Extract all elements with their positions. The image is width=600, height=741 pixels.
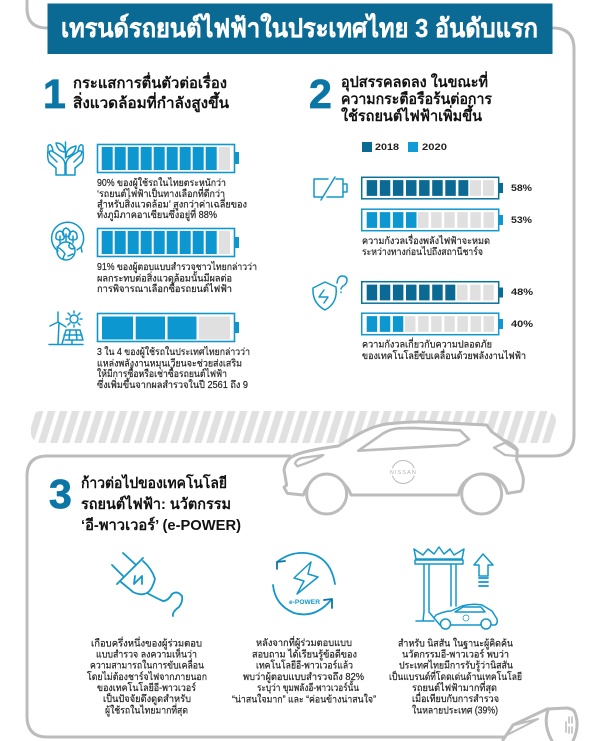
- text: safety concern: ความกังวลเกี่ยวกับความปลอดภัย: [362, 338, 492, 351]
- text: column 1: เป็นปัจจัยดึงดูดสำหรับ: [103, 692, 191, 705]
- text: column 2: พบว่าผู้ตอบแบบสำรวจถึง 82%: [243, 671, 364, 683]
- icon: globe with trees: [52, 222, 84, 260]
- panel frame: bottom section: [27, 456, 503, 737]
- icon: e-POWER cycle with lightning bolt: e-POWER: [289, 600, 321, 606]
- text: 3 in 4 finding: แหล่งพลังงานหมุนเวียนจะช่วยส่งเสริม: [97, 358, 242, 370]
- text: 90% finding: 90% ของผู้ใช้รถในไทยตระหนักว่า: [97, 177, 226, 189]
- section 2 heading: [309, 71, 493, 125]
- text: column 2: [232, 636, 376, 705]
- icon: low battery: [314, 177, 347, 200]
- section 3 heading: ‘อี-พาวเวอร์’ (e-POWER): [81, 516, 241, 534]
- section 1 heading: [43, 71, 230, 117]
- text: column 3: เมื่อเทียบกับการสำรวจ: [412, 692, 499, 705]
- value 48%: 48%: [511, 287, 534, 298]
- illustration: charging connector: [503, 708, 577, 741]
- text: column 3: ประเทศไทยมีการรับรู้ว่านิสสัน: [399, 660, 513, 672]
- battery: safety 2018: [362, 282, 503, 303]
- text: column 2: หลังจากที่ผู้ร่วมตอบแบบ: [256, 636, 352, 649]
- text: column 1: แบบสำรวจ ลงความเห็นว่า: [96, 648, 197, 661]
- text: column 1: ผู้ใช้รถในไทยมากที่สุด: [105, 703, 188, 716]
- text: column 1: โดยไม่ต้องชาร์จไฟจากภายนอก: [87, 671, 207, 683]
- icon: shield with question mark: [313, 276, 347, 310]
- diagonal stripe band: [31, 411, 556, 443]
- section 3 heading: รถยนต์ไฟฟ้า: นวัตกรรม: [81, 494, 231, 513]
- value 58%: 58%: [511, 183, 533, 194]
- text: column 2: ระบุว่า ขุมพลังอี-พาวเวอร์นั้น: [257, 680, 359, 694]
- text: safety concern: [362, 338, 526, 362]
- section 2 heading: ใช้รถยนต์ไฟฟ้าเพิ่มขึ้น: [341, 104, 483, 125]
- text: range anxiety: ระหว่างทางก่อนไปถึงสถานีชาร์จ: [362, 246, 483, 258]
- text: 3 in 4 finding: ให้มีการซื้อหรือเช่าซื้อรถยนต์ไฟฟ้า: [97, 366, 227, 380]
- text: 91% finding: ผลกระทบต่อสิ่งแวดล้อมนั้นมีผลต่อ: [97, 270, 232, 284]
- battery: range anxiety 2020: [362, 209, 503, 231]
- icon: wind turbine and solar panel: [49, 311, 83, 344]
- text: column 2: สอบถาม ได้เรียนรู้ข้อดีของ: [252, 648, 357, 660]
- text: column 1: เกือบครึ่งหนึ่งของผู้ร่วมตอบ: [91, 636, 202, 649]
- section 3 heading: ก้าวต่อไปของเทคโนโลยี: [81, 473, 227, 492]
- text: column 3: [389, 637, 522, 716]
- text: 90% finding: ทั้งภูมิภาคอาเซียนซึ่งอยู่ที่ 88%: [97, 207, 217, 221]
- text: column 3: นวัตกรรมอี-พาวเวอร์ พบว่า: [402, 649, 509, 661]
- text: column 2: เทคโนโลยีอี-พาวเวอร์แล้ว: [256, 660, 353, 672]
- battery: range anxiety 2018: [362, 177, 503, 199]
- title banner: [48, 4, 552, 54]
- battery: 91%: [98, 228, 239, 256]
- value 40%: 40%: [511, 319, 534, 330]
- text: column 3: ในหลายประเทศ (39%): [412, 704, 498, 716]
- text: column 1: [87, 636, 207, 716]
- text: column 1: ของเทคโนโลยีอี-พาวเวอร์: [97, 682, 196, 694]
- text: column 1: ความสามารถในการขับเคลื่อน: [90, 659, 204, 672]
- text: 90% finding: [97, 177, 247, 221]
- text: column 2: “น่าสนใจมาก” และ “ค่อนข้างน่าสนใจ”: [232, 693, 376, 705]
- text: column 3: สำหรับ นิสสัน ในฐานะผู้คิดค้น: [398, 637, 513, 649]
- text: safety concern: ของเทคโนโลยีขับเคลื่อนด้วยพลังงานไฟฟ้า: [362, 349, 526, 362]
- legend: 2018: [375, 142, 399, 153]
- section 2 heading: ความกระตือรือร้นต่อการ: [341, 91, 493, 108]
- illustration: car outline with Nissan logo: [284, 422, 523, 514]
- icon: hands holding plant: [48, 142, 83, 175]
- battery: 90%: [98, 144, 239, 172]
- legend: 2020: [422, 142, 447, 153]
- icon: Thai gate with car and up arrow: [414, 547, 497, 629]
- text: 90% finding: ‘รถยนต์ไฟฟ้าเป็นทางเลือกที่ดีกว่า: [97, 187, 225, 200]
- battery: 3 in 4: [98, 314, 239, 342]
- section 1 heading: กระแสการตื่นตัวต่อเรื่อง: [73, 72, 227, 92]
- text: column 3: เป็นแบรนด์ที่โดดเด่นด้านเทคโนโลยี: [389, 670, 522, 683]
- section 3 heading: 3: [49, 471, 72, 517]
- title banner: เทรนด์รถยนต์ไฟฟ้าในประเทศไทย 3 อันดับแรก: [61, 12, 538, 43]
- text: 91% finding: การพิจารณาเลือกซื้อรถยนต์ไฟฟ้า: [97, 281, 232, 295]
- battery: safety 2020: [362, 313, 503, 335]
- section 1 heading: 1: [43, 71, 66, 117]
- section 2 heading: 2: [309, 71, 332, 117]
- icon: electric plug with cable: [112, 553, 182, 616]
- legend: [362, 142, 447, 153]
- panel frame: top section: [27, 0, 574, 456]
- text: 91% finding: 91% ของผู้ตอบแบบสำรวจชาวไทยกล่าวว่า: [97, 261, 257, 273]
- text: 3 in 4 finding: ซึ่งเพิ่มขึ้นจากผลสำรวจในปี 2561 ถึง 9: [97, 377, 248, 391]
- text: column 3: รถยนต์ไฟฟ้ามากที่สุด: [412, 681, 497, 694]
- text: range anxiety: [362, 234, 490, 258]
- text: 3 in 4 finding: [97, 346, 250, 391]
- value 53%: 53%: [511, 215, 533, 226]
- text: 90% finding: สำหรับสิ่งแวดล้อม’ สูงกว่าค่าเฉลี่ยของ: [97, 198, 247, 210]
- section 1 heading: สิ่งแวดล้อมที่กำลังสูงขึ้น: [73, 91, 230, 113]
- text: 3 in 4 finding: 3 ใน 4 ของผู้ใช้รถในประเทศไทยกล่าวว่า: [97, 346, 250, 358]
- icon: e-POWER cycle with lightning bolt: [273, 553, 335, 614]
- illustration: car outline with Nissan logo: NISSAN: [390, 470, 417, 476]
- section 3 heading: [49, 471, 241, 534]
- section 2 heading: อุปสรรคลดลง ในขณะที่: [341, 71, 488, 92]
- text: range anxiety: ความกังวลเรื่องพลังไฟฟ้าจะหมด: [362, 234, 490, 247]
- text: 91% finding: [97, 261, 257, 295]
